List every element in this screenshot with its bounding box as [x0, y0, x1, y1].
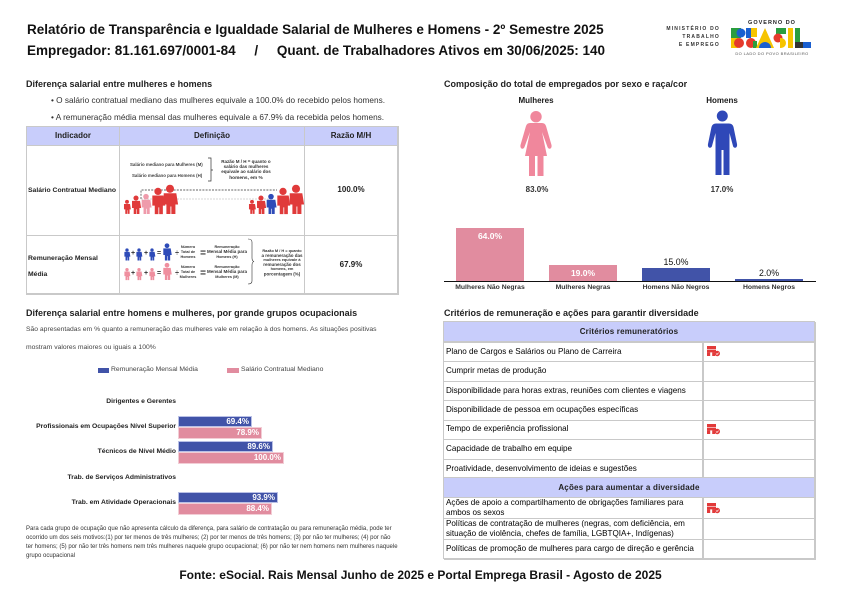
- value: 17.0%: 17.0%: [711, 185, 733, 194]
- bar: 78.9: [178, 427, 262, 439]
- text: nota: grupo ocupacional: [26, 553, 75, 559]
- icon: diagrama remuneração média: [124, 238, 303, 284]
- row: proatividade: Proatividade, desenvolvimento de ideias e sugestões: [446, 464, 637, 473]
- icon: diagrama remuneração média: ÷: [175, 270, 179, 277]
- value: 2.0%: 2.0%: [759, 268, 779, 278]
- label: mulheres: Mulheres: [518, 96, 554, 105]
- icon: diagrama salário mediano: [124, 158, 304, 214]
- cell: definição remuneração: [120, 236, 305, 294]
- header: razão: Razão M/H: [331, 131, 371, 140]
- icon: diagrama remuneração média: Mensal Média para: [207, 249, 248, 254]
- icon: diagrama remuneração média: Remuneração: [214, 245, 240, 249]
- text: nota: ocorrido um dos seis motivos:(1) por ter menos de três mulheres; (2) por ter menos de três homens; (3) por não ter mulheres; (4) por não: [26, 535, 390, 541]
- bar: 93.9: [178, 492, 278, 503]
- icon: diagrama remuneração média: Mensal Média para: [207, 269, 248, 274]
- bar: mulheres não negras: 64.0%: [478, 231, 502, 241]
- bar: 88.4: 88.4%: [246, 504, 269, 513]
- logo: governo do brasil: DO LADO DO POVO BRASILEIRO: [735, 51, 809, 56]
- logo: ministério: MINISTÉRIO DO: [666, 26, 720, 32]
- bar: homens negros: [735, 279, 803, 281]
- bar: mulheres negras: [549, 265, 617, 281]
- row: horas extras: [444, 382, 703, 401]
- icon: diagrama remuneração média: =: [157, 270, 161, 277]
- icon: diagrama remuneração média: ÷: [175, 250, 179, 257]
- cell: remuneração mensal média: Média: [28, 271, 47, 278]
- bar: 100.0: [178, 452, 284, 464]
- row: contratação: Políticas de contratação de mulheres (negras, com deficiência, em: [446, 519, 685, 528]
- panel: tabela indicadores: [26, 126, 399, 295]
- header: ações: [444, 478, 815, 498]
- heading: critérios: Critérios de remuneração e ações para garantir diversidade: [444, 308, 699, 318]
- icon: diagrama remuneração média: mulheres equivale à: [263, 257, 301, 262]
- label: homens: Homens: [706, 96, 738, 105]
- cell: 67.9%: [305, 236, 398, 294]
- cell: remuneração mensal média: [27, 236, 120, 294]
- row: promoção: [444, 540, 703, 559]
- panel: tabela critérios: [444, 322, 816, 560]
- cell: salário contratual mediano: Salário Contratual Mediano: [28, 187, 116, 194]
- row: contratação: situação de violência, chefes de família, LGBTQIA+, Indígenas): [446, 529, 674, 538]
- icon: diagrama remuneração média: +: [144, 250, 148, 257]
- text: explicação: [26, 326, 377, 350]
- icon: diagrama salário mediano: Razão M / H = quanto o: [221, 159, 271, 164]
- row: tempo de experiência: [444, 421, 703, 440]
- cell: 100.0%: 100.0%: [337, 185, 365, 194]
- row: plano de cargos: Plano de Cargos e Salários ou Plano de Carreira: [446, 347, 621, 356]
- row: metas: [444, 362, 703, 382]
- bar: 93.9: 93.9%: [252, 493, 275, 502]
- icon: check tempo de experiência: [707, 424, 720, 434]
- icon: homem: [708, 110, 738, 175]
- icon: diagrama remuneração média: Homens (H): [216, 255, 238, 259]
- label: dirigentes: Dirigentes e Gerentes: [106, 398, 176, 404]
- label: profissionais: Profissionais em Ocupações Nível Superior: [36, 422, 176, 430]
- row: tempo de experiência: Tempo de experiência profissional: [446, 424, 568, 433]
- text: nota: [26, 526, 398, 559]
- text: explicação: mostram valores maiores ou iguais a 100%: [26, 344, 156, 350]
- heading: diferença salarial: Diferença salarial entre mulheres e homens: [26, 79, 212, 89]
- cell: 100.0%: [305, 146, 398, 236]
- value: 83.0%: 83.0%: [526, 185, 548, 194]
- bar chart: grupos ocupacionais: [36, 398, 284, 515]
- icon: diagrama remuneração média: Total de: [181, 270, 195, 274]
- text: bullets: • A remuneração média mensal das mulheres equivale a 67.9% da recebida pelos homens.: [51, 112, 384, 122]
- logo: ministério: E EMPREGO: [679, 42, 720, 48]
- axis: [444, 281, 816, 282]
- icon: check compartilhamento: [707, 503, 720, 514]
- bar: homens não negros: [642, 268, 710, 281]
- legend: [98, 366, 324, 373]
- header: razão: [305, 127, 398, 146]
- header: definição: [120, 127, 305, 146]
- icon: diagrama salário mediano: Salário mediano para Mulheres (M): [130, 162, 203, 167]
- title: [27, 22, 605, 58]
- icon: diagrama salário mediano: Salário mediano para Homens (H): [132, 173, 203, 178]
- text: bullets: [51, 96, 385, 122]
- icon: diagrama remuneração média: Homens: [181, 255, 195, 259]
- text: bullets: • O salário contratual mediano das mulheres equivale a 100.0% do recebido pelos homens.: [51, 96, 385, 105]
- header: critérios remuneratórios: Critérios remuneratórios: [580, 327, 678, 336]
- row: metas: Cumprir metas de produção: [446, 366, 546, 375]
- row: plano de cargos: [444, 343, 703, 362]
- icon: diagrama salário mediano: equivale ao salário dos: [221, 169, 271, 174]
- bar: 88.4: [178, 503, 272, 515]
- icon: diagrama remuneração média: remuneração dos: [263, 262, 301, 267]
- header: critérios remuneratórios: [444, 322, 815, 342]
- icon: diagrama remuneração média: porcentagem (%): [264, 272, 301, 276]
- cell: remuneração mensal média: Remuneração Mensal: [28, 255, 98, 262]
- icon: diagrama remuneração média: +: [131, 250, 135, 257]
- row: promoção: Políticas de promoção de mulheres para cargo de direção e gerência: [446, 544, 694, 553]
- text: nota: ter homens; (5) por não ter três homens nem três mulheres naquele grupo ocupacional; (6) por não ter nem homens nem mulheres naquele: [26, 544, 398, 550]
- icon: diagrama remuneração média: Razão M / H = quanto: [262, 248, 302, 253]
- icon: diagrama remuneração média: Número: [181, 265, 196, 269]
- icon: diagrama remuneração média: =: [200, 268, 206, 279]
- icon: check plano de cargos: [707, 346, 720, 356]
- row: proatividade: [444, 460, 703, 478]
- row: ocupações específicas: [444, 401, 703, 421]
- legend: remuneração: [98, 368, 109, 373]
- icon: diagrama remuneração média: a remuneração das: [261, 253, 303, 258]
- logo: ministério: TRABALHO: [682, 34, 720, 40]
- row: compartilhamento: [444, 498, 703, 519]
- bar: 89.6: [178, 441, 273, 452]
- bar: 100.0: 100.0%: [254, 453, 281, 462]
- label: técnicos: Técnicos de Nível Médio: [98, 448, 176, 455]
- row: compartilhamento: ambos os sexos: [446, 508, 504, 517]
- label: atividade operacional: Trab. em Atividade Operacionais: [72, 499, 176, 506]
- heading: diferença por grupos: Diferença salarial entre homens e mulheres, por grande grupos ocupacionais: [26, 308, 357, 318]
- header: definição: Definição: [194, 131, 230, 140]
- cell: definição salário: [120, 146, 305, 236]
- row: trabalho em equipe: [444, 440, 703, 460]
- icon: diagrama remuneração média: +: [131, 270, 135, 277]
- icon: mulher: [520, 111, 552, 176]
- logo: governo do brasil: GOVERNO DO: [748, 20, 796, 26]
- label: homens não negros: Homens Não Negros: [643, 284, 709, 291]
- title: Empregador: 81.161.697/0001-84 / Quant. de Trabalhadores Ativos em 30/06/2025: 140: [27, 43, 605, 58]
- legend: salário: [227, 368, 239, 373]
- icon: diagrama remuneração média: Total de: [181, 250, 195, 254]
- bar: 78.9: 78.9%: [236, 428, 259, 437]
- cell: salário contratual mediano: [27, 146, 120, 236]
- row: contratação: [444, 519, 703, 540]
- header: ações: Ações para aumentar a diversidade: [558, 483, 700, 492]
- label: mulheres não negras: Mulheres Não Negras: [455, 284, 525, 291]
- legend: Salário Contratual Mediano: [241, 366, 323, 373]
- bar: 89.6: 89.6%: [247, 442, 270, 451]
- icon: diagrama remuneração média: homens, em: [271, 266, 294, 271]
- row: ocupações específicas: Disponibilidade de pessoa em ocupações específicas: [446, 405, 638, 414]
- fonte: Fonte: eSocial. Rais Mensal Junho de 2025 e Portal Emprega Brasil - Agosto de 2025: [179, 568, 662, 582]
- value: 15.0%: 15.0%: [664, 257, 688, 267]
- icon: diagrama remuneração média: Mulheres (M): [215, 275, 239, 279]
- label: mulheres negras: Mulheres Negras: [556, 284, 610, 291]
- bar chart: raça e sexo: [444, 228, 816, 291]
- icon: diagrama salário mediano: salário das mulheres: [224, 164, 269, 169]
- icon: diagrama remuneração média: Remuneração: [214, 265, 240, 269]
- text: explicação: São apresentadas em % quanto a remuneração das mulheres vale em relação à dos homens. As situações positivas: [26, 326, 377, 333]
- bar: 69.4: 69.4%: [226, 417, 249, 426]
- icon: diagrama salário mediano: homens, em %: [229, 175, 264, 181]
- bar: 69.4: [178, 416, 252, 427]
- icon: diagrama remuneração média: +: [144, 270, 148, 277]
- logo: governo do brasil: [731, 20, 811, 56]
- icon: diagrama remuneração média: =: [200, 248, 206, 259]
- row: trabalho em equipe: Capacidade de trabalho em equipe: [446, 444, 572, 453]
- row: horas extras: Disponibilidade para horas extras, reuniões com clientes e viagens: [446, 386, 686, 395]
- text: nota: Para cada grupo de ocupação que não apresenta cálculo da diferença, para salário de contratação ou para remuneração média, pode ter: [26, 526, 392, 532]
- logo: ministério: [666, 25, 720, 48]
- legend: Remuneração Mensal Média: [111, 366, 198, 373]
- icon: diagrama remuneração média: =: [157, 250, 161, 257]
- icon: diagrama remuneração média: Número: [181, 245, 196, 249]
- label: serviços administrativos: Trab. de Serviços Administrativos: [67, 474, 176, 480]
- heading: composição: Composição do total de empregados por sexo e raça/cor: [444, 79, 687, 89]
- title: Relatório de Transparência e Igualdade Salarial de Mulheres e Homens - 2º Semestre 2025: [27, 22, 604, 37]
- cell: 67.9%: 67.9%: [340, 260, 362, 269]
- row: compartilhamento: Ações de apoio a compartilhamento de obrigações familiares para: [446, 498, 684, 507]
- bar: mulheres não negras: [456, 228, 524, 281]
- header: indicador: [27, 127, 120, 146]
- icon: diagrama remuneração média: Mulheres: [180, 275, 196, 279]
- label: homens negros: Homens Negros: [743, 284, 795, 291]
- bar: mulheres negras: 19.0%: [571, 268, 595, 278]
- header: indicador: Indicador: [55, 131, 91, 140]
